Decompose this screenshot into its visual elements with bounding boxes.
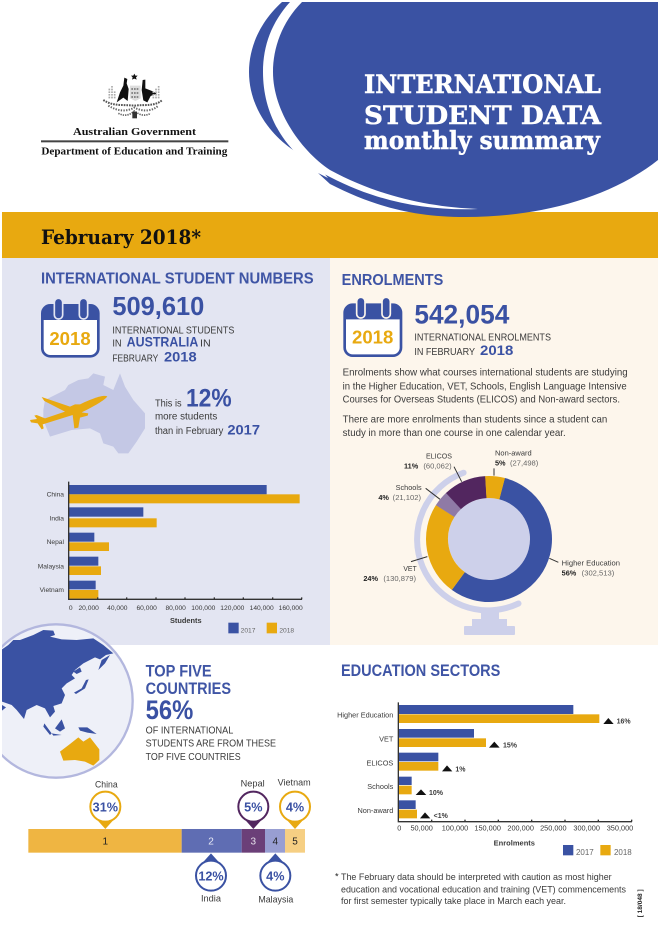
category labels — [337, 711, 394, 815]
pin: Vietnam: 4% — [286, 800, 304, 814]
pin: Vietnam: Vietnam — [278, 778, 311, 788]
category labels: Nepal — [47, 539, 65, 546]
bar chart: enrolments by sector: 16% — [617, 719, 631, 726]
description: STUDENTS ARE FROM THESE — [146, 739, 276, 750]
growth statement: 2017 — [227, 421, 260, 437]
big percentage: 56% — [146, 695, 193, 725]
heading: ENROLMENTS — [342, 272, 443, 289]
axis labels: 300,000 — [573, 824, 600, 833]
footnote: education and vocational education and training (VET) commencements — [341, 884, 626, 894]
axis labels: 80,000 — [165, 605, 186, 612]
pin: Nepal: 5% — [244, 800, 262, 814]
growth statement — [155, 386, 260, 437]
big number: 542,054 — [414, 299, 510, 329]
section: top five countries — [0, 620, 311, 904]
growth markers — [416, 718, 614, 818]
label: VET: VET — [403, 564, 417, 573]
icon: globe showing Asia and Australia — [0, 620, 133, 787]
axis labels: 120,000 — [220, 605, 245, 612]
category labels: VET — [379, 734, 394, 743]
section: education sectors — [335, 661, 644, 917]
title: monthly summary — [364, 126, 601, 155]
title: INTERNATIONAL — [364, 70, 601, 99]
panel: international student numbers background — [2, 257, 330, 645]
stacked bar: 5 — [292, 836, 298, 847]
description: 2018 — [480, 342, 514, 358]
description — [146, 725, 276, 763]
description: IN — [200, 339, 211, 350]
label: ELICOS: 11% — [404, 461, 419, 470]
pin: Malaysia: 4% — [266, 869, 284, 883]
axis labels: 100,000 — [191, 605, 216, 612]
growth statement: 12% — [186, 386, 232, 413]
pin: China — [90, 779, 120, 829]
pin: India: India — [201, 894, 221, 904]
icon: coat of arms — [103, 74, 162, 118]
label: ELICOS: ELICOS — [426, 451, 452, 460]
explanatory text: Courses for Overseas Students (ELICOS) and Non-award sectors. — [343, 395, 620, 406]
document code: [ 18/048 ] — [638, 889, 644, 917]
label: VET: 24% — [363, 574, 378, 583]
label: Schools: (21,102) — [393, 493, 421, 502]
label: Higher Education — [562, 559, 620, 578]
icon: map of Australia with plane — [30, 373, 145, 453]
legend: 2017 — [576, 848, 594, 857]
title — [364, 70, 602, 155]
stacked bar: 3 — [251, 836, 257, 847]
icon: calendar — [42, 298, 98, 356]
category labels: Malaysia — [38, 563, 64, 570]
label: Higher Education: Higher Education — [562, 559, 620, 568]
donut chart: enrolments by sector — [416, 466, 562, 612]
heading: EDUCATION SECTORS — [341, 661, 500, 680]
logo: Australian Government: Department of Education and Training — [41, 147, 227, 158]
stacked bar: 1 — [103, 836, 109, 847]
date heading: February 2018* — [41, 225, 201, 249]
bar chart: enrolments by sector: 1% — [455, 766, 466, 773]
axis labels: 40,000 — [107, 605, 128, 612]
label: Schools: 4% — [378, 493, 389, 502]
axis labels: 100,000 — [442, 824, 468, 833]
legend — [563, 845, 632, 857]
footnote — [335, 871, 626, 906]
icon: calendar: 2018 — [49, 328, 91, 349]
label: VET: (130,879) — [383, 574, 416, 583]
label: ELICOS: (60,062) — [423, 461, 452, 470]
bar chart: students by country — [38, 482, 303, 635]
heading: COUNTRIES — [146, 679, 231, 698]
bar chart: enrolments by sector: <1% — [434, 813, 449, 820]
label: Higher Education: 56% — [562, 569, 577, 578]
plane — [30, 396, 107, 429]
label: VET — [363, 564, 417, 583]
pin: Vietnam — [278, 778, 311, 829]
axis labels: 50,000 — [410, 824, 433, 833]
category labels: Vietnam — [40, 587, 64, 594]
stacked bar — [28, 829, 305, 853]
label: Non-award: 5% — [495, 458, 506, 467]
growth statement: This is — [155, 399, 182, 410]
axis labels: 0 — [69, 605, 73, 612]
category labels: Schools — [367, 782, 394, 791]
explanatory text: There are more enrolments than students since a student can — [343, 415, 607, 426]
title: STUDENT DATA — [364, 101, 602, 130]
logo: Australian Government: Australian Government — [73, 127, 196, 138]
map — [43, 373, 145, 453]
label: ELICOS — [404, 451, 452, 470]
description: TOP FIVE COUNTRIES — [146, 752, 241, 763]
header blue swoosh — [249, 2, 658, 217]
stacked bar: 2 — [208, 836, 214, 847]
pin: Malaysia: Malaysia — [258, 894, 293, 904]
axis labels: 20,000 — [78, 605, 99, 612]
pin: India — [196, 853, 226, 904]
axis title: Enrolments — [494, 839, 535, 848]
axis labels: 60,000 — [136, 605, 157, 612]
description — [112, 326, 235, 365]
donut labels — [363, 448, 620, 583]
axis labels: 0 — [397, 824, 401, 833]
Australia landmass — [60, 737, 99, 766]
icon: calendar: 2018 — [352, 326, 393, 347]
label: Schools: Schools — [396, 483, 422, 492]
axis labels: 200,000 — [507, 824, 534, 833]
label: Non-award — [495, 448, 538, 467]
explanatory text: in the Higher Education, VET, Schools, English Language Intensive — [343, 381, 627, 392]
footnote: for first semester typically take place in March each year. — [341, 896, 566, 906]
category labels: Higher Education — [337, 711, 393, 720]
footnote: The February data should be interpreted with caution as most higher — [341, 872, 612, 882]
pin: Malaysia — [258, 853, 293, 904]
legend: 2018 — [279, 628, 294, 635]
description: OF INTERNATIONAL — [146, 725, 234, 736]
axis labels: 160,000 — [279, 605, 303, 612]
Asia landmass — [2, 630, 113, 719]
description: FEBRUARY — [112, 353, 159, 364]
axis labels: 140,000 — [250, 605, 274, 612]
axis title: Students — [170, 616, 202, 625]
heading: TOP FIVE — [146, 662, 212, 681]
growth statement: than in February — [155, 426, 223, 437]
stacked bar: 4 — [273, 836, 279, 847]
axis labels: 350,000 — [607, 824, 633, 833]
axis labels: 250,000 — [540, 824, 567, 833]
heading — [146, 662, 231, 698]
description — [414, 332, 551, 358]
explanatory text: study in more than one course in one calendar year. — [343, 428, 566, 439]
pin: China: 31% — [93, 800, 118, 814]
explanatory text — [343, 368, 628, 439]
2018 bars — [68, 494, 300, 599]
growth statement: more students — [155, 411, 217, 422]
pin: India: 12% — [198, 869, 224, 883]
date band — [2, 212, 658, 258]
bar chart: enrolments by sector: 10% — [429, 790, 444, 797]
label: Schools — [378, 483, 422, 502]
category labels: Non-award — [357, 806, 393, 815]
logo: Australian Government — [41, 127, 228, 158]
description: 2018 — [164, 349, 197, 365]
description: IN — [112, 339, 122, 350]
section: enrolments — [342, 272, 628, 439]
pin: Nepal: Nepal — [241, 778, 265, 788]
pin: China: China — [95, 779, 118, 789]
section: international student numbers — [41, 270, 314, 437]
label: Non-award: (27,498) — [510, 458, 538, 467]
axis labels — [397, 824, 633, 833]
description: IN FEBRUARY — [414, 347, 475, 358]
bar chart: enrolments by sector: 15% — [503, 742, 518, 749]
legend: 2017 — [241, 628, 256, 635]
footnote: * — [335, 871, 339, 881]
category labels: China — [47, 492, 64, 499]
bar chart: enrolments by sector — [337, 702, 633, 857]
2017 bars — [68, 485, 267, 589]
legend — [228, 623, 294, 635]
panel: enrolments background — [330, 257, 658, 645]
icon: calendar — [345, 297, 401, 356]
big number: 509,610 — [112, 291, 204, 321]
explanatory text: Enrolments show what courses international students are studying — [343, 368, 628, 379]
description: INTERNATIONAL STUDENTS — [112, 326, 235, 337]
category labels: India — [50, 515, 64, 522]
axis labels — [69, 605, 303, 612]
label: Non-award: Non-award — [495, 448, 532, 457]
description: AUSTRALIA — [127, 334, 198, 350]
legend: 2018 — [614, 848, 632, 857]
globe stand — [417, 473, 518, 635]
category labels — [38, 492, 65, 594]
category labels: ELICOS — [366, 758, 393, 767]
label: Higher Education: (302,513) — [582, 569, 614, 578]
pin: Nepal — [238, 778, 268, 829]
description: INTERNATIONAL ENROLMENTS — [414, 332, 551, 343]
heading: INTERNATIONAL STUDENT NUMBERS — [41, 270, 314, 287]
axis labels: 150,000 — [474, 824, 501, 833]
